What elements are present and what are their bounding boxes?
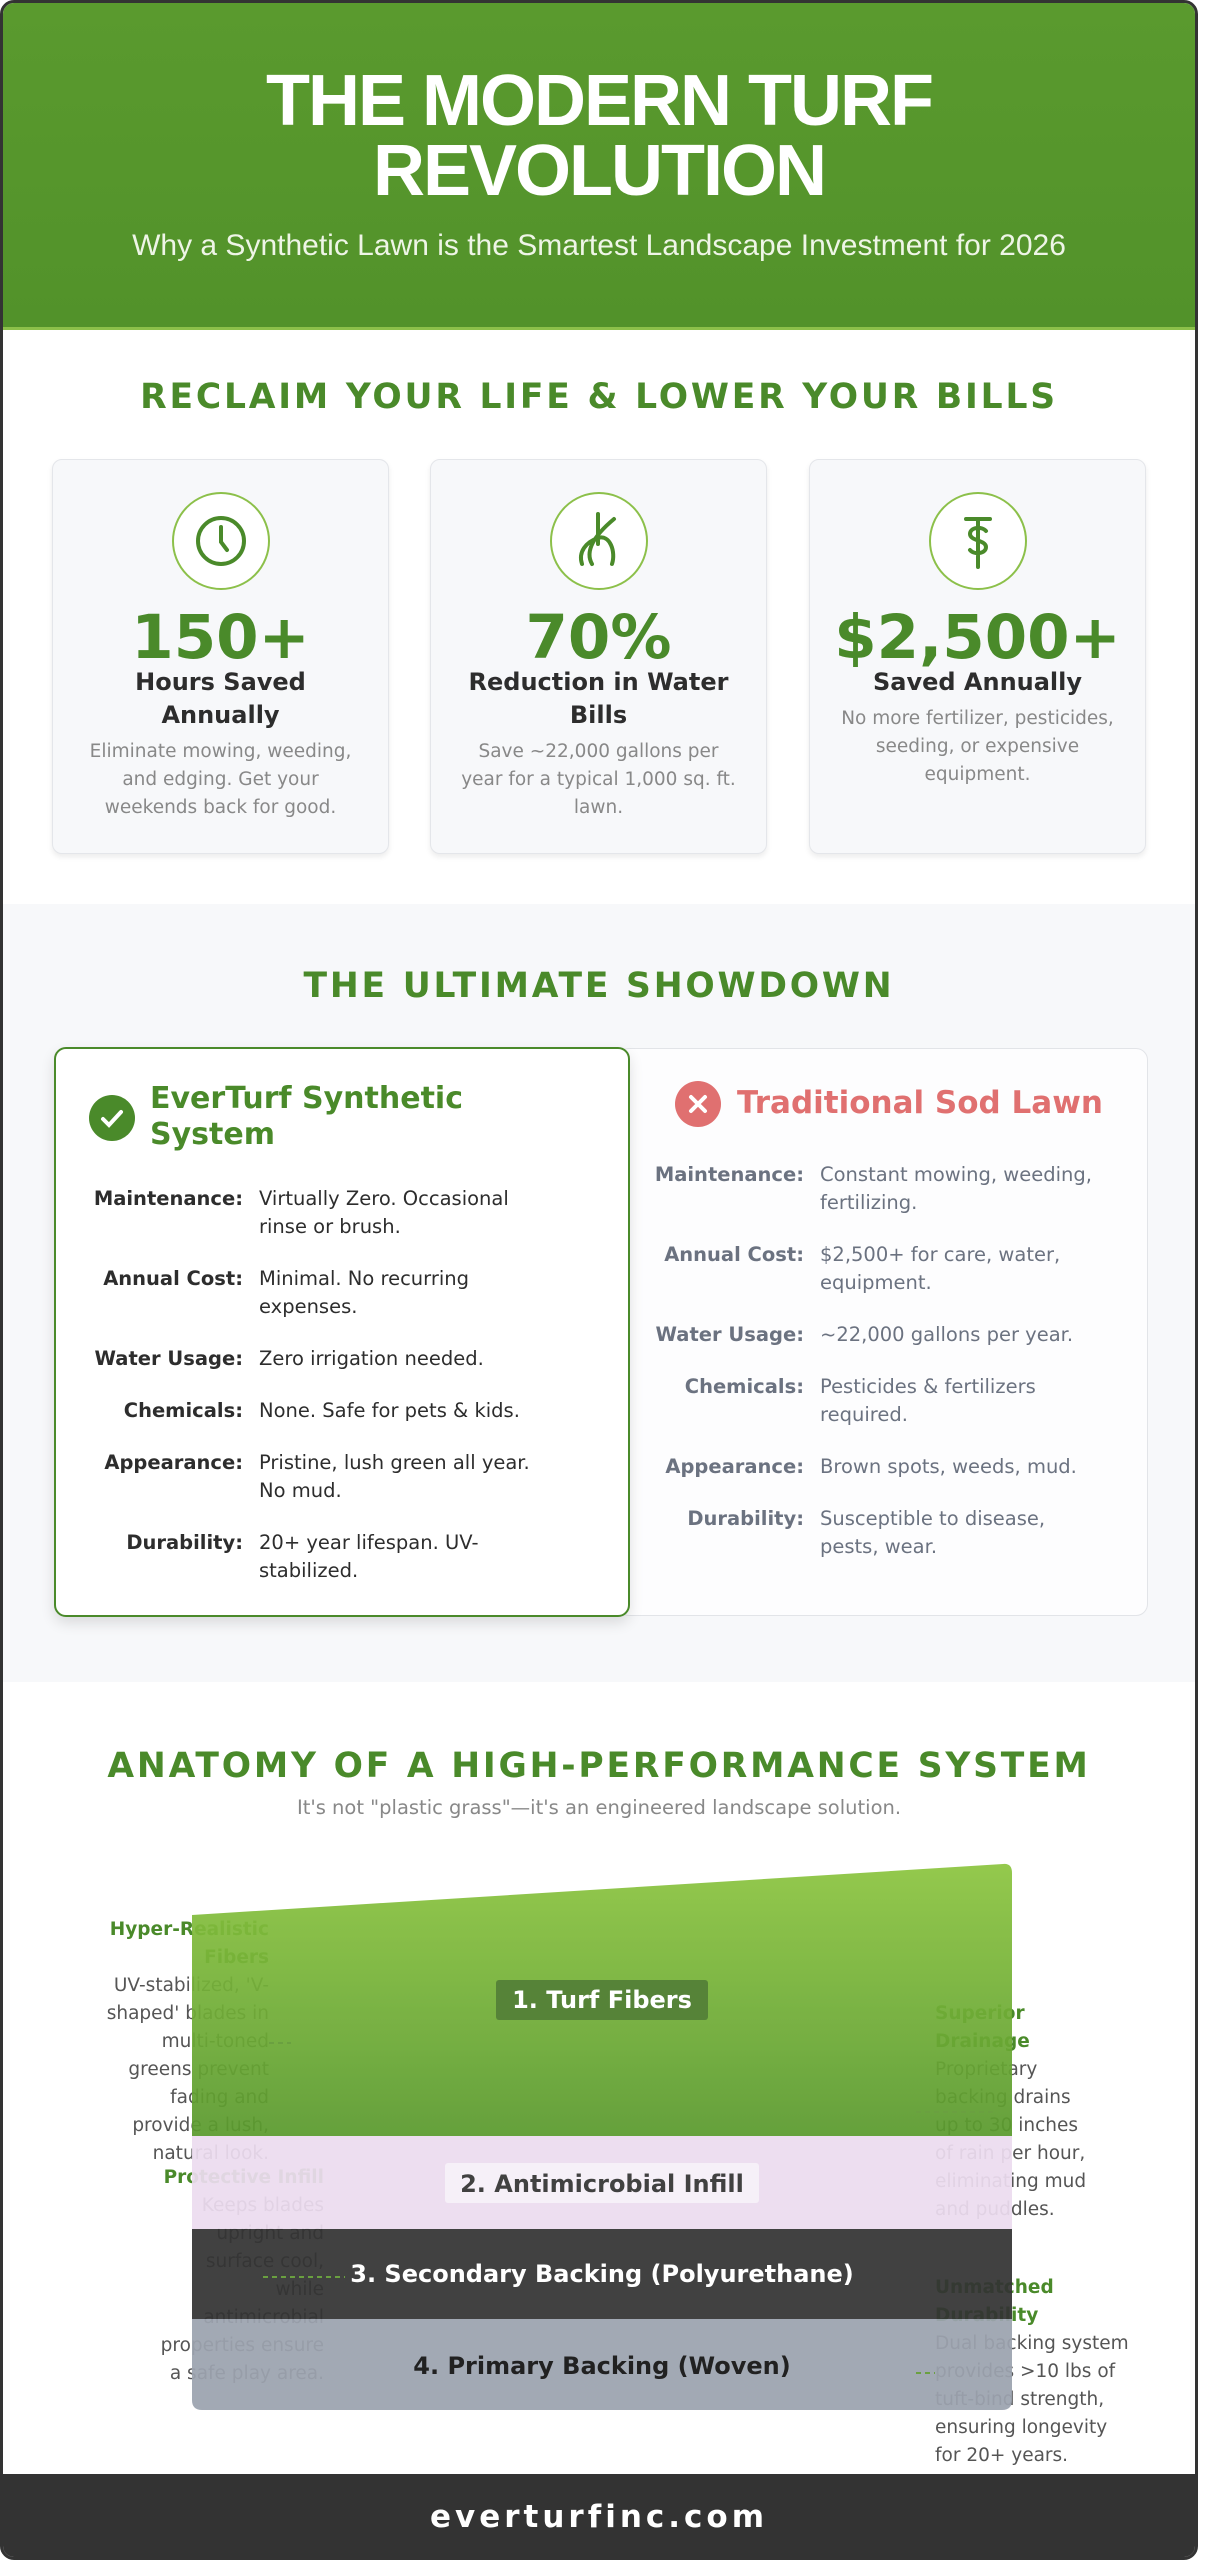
stat label: Reduction in Water [469,668,728,696]
card: money [809,459,1146,854]
footer [3,2474,1195,2560]
comparison rows: None. Safe for pets & kids. [259,1399,520,1422]
description: No more fertilizer, pesticides, seeding, or expensive equipment. [841,708,1114,785]
icon: water [550,492,648,590]
comparison rows: Appearance: [104,1451,243,1474]
icon: x [675,1081,721,1127]
comparison rows: Durability: [126,1531,243,1554]
icon: clock [172,492,270,590]
icon: check [89,1095,135,1141]
comparison rows: 20+ year lifespan. UV-stabilized. [259,1531,478,1582]
subtitle: anatomy: It's not "plastic grass"—it's an engineered landscape solution. [297,1796,901,1819]
panel title: Traditional Sod Lawn [737,1085,1103,1121]
comparison rows: Appearance: [665,1455,804,1478]
annotation: drainage: Superior Drainage [935,2003,1030,2052]
comparison rows: Annual Cost: [664,1243,804,1266]
comparison rows: Pesticides & fertilizers required. [820,1375,1036,1426]
layer 3: secondary backing: 3. Secondary Backing (Polyurethane) [350,2260,854,2288]
section: showdown background [3,904,1195,1682]
panel title [150,1081,463,1152]
stat label: Saved Annually [873,668,1082,696]
comparison rows [94,1187,530,1582]
title [266,61,932,211]
comparison rows: Virtually Zero. Occasional rinse or brush. [259,1187,509,1238]
annotation: fibers: Hyper-Realistic Fibers [110,1919,269,1968]
stat label [469,668,728,729]
stat label: Bills [570,701,627,729]
layer 1: turf fibers [192,1864,1012,2136]
annotation: infill: Protective Infill [164,2167,324,2188]
comparison rows: Pristine, lush green all year. No mud. [259,1451,530,1502]
comparison rows: Brown spots, weeds, mud. [820,1455,1077,1478]
comparison rows: Maintenance: [94,1187,243,1210]
panel title: System [150,1117,275,1152]
layer 4: primary backing [192,2319,1012,2410]
comparison rows: Maintenance: [655,1163,804,1186]
layer 2: infill: 2. Antimicrobial Infill [460,2170,744,2198]
card: hours [52,459,389,854]
description: Save ~22,000 gallons per year for a typical 1,000 sq. ft. lawn. [461,741,736,818]
stat number: 150+ [131,602,310,673]
layer 3: secondary backing [192,2229,1012,2319]
annotation: drainage: Proprietary backing drains up to 30 inches of rain per hour, eliminating mud and puddles. [935,2059,1086,2220]
stat label [135,668,306,729]
diagram: turf layers [192,1864,1012,2410]
layer 2: infill [192,2136,1012,2229]
header [3,3,1195,330]
comparison rows: Water Usage: [655,1323,804,1346]
comparison rows: Durability: [687,1507,804,1530]
stat label: Annually [161,701,280,729]
heading: anatomy: ANATOMY OF A HIGH-PERFORMANCE SYSTEM [107,1746,1091,1786]
heading: reclaim: RECLAIM YOUR LIFE & LOWER YOUR BILLS [140,377,1058,417]
comparison rows: Chemicals: [685,1375,804,1398]
comparison rows: Susceptible to disease, pests, wear. [820,1507,1045,1558]
footer: everturfinc.com [430,2499,768,2535]
stat number: 70% [525,602,672,673]
comparison rows: Minimal. No recurring expenses. [259,1267,469,1318]
card: water [430,459,767,854]
annotation: durability: Dual backing system provides >10 lbs of tuft-bind strength, ensuring longevity for 20+ years. [935,2333,1129,2466]
comparison rows: Water Usage: [94,1347,243,1370]
comparison rows: ~22,000 gallons per year. [820,1323,1073,1346]
layer 1: turf fibers: 1. Turf Fibers [512,1986,692,2014]
icon: dollar [929,492,1027,590]
annotation: durability: Unmatched Durability [935,2277,1054,2326]
annotation: infill: Keeps blades upright and surface cool, while antimicrobial properties ensure a safe play area. [161,2195,324,2384]
panel: traditional sod [617,1048,1148,1616]
heading: showdown: THE ULTIMATE SHOWDOWN [304,966,894,1006]
comparison rows: Chemicals: [124,1399,243,1422]
comparison rows: $2,500+ for care, water, equipment. [820,1243,1060,1294]
stat label: Hours Saved [135,668,306,696]
panel: everturf [54,1047,630,1617]
stat number: $2,500+ [834,602,1121,673]
description: Eliminate mowing, weeding, and edging. Get your weekends back for good. [90,741,351,818]
title: REVOLUTION [373,131,825,211]
panel title: EverTurf Synthetic [150,1081,463,1116]
comparison rows: Constant mowing, weeding, fertilizing. [820,1163,1092,1214]
comparison rows: Annual Cost: [103,1267,243,1290]
layer 4: primary backing: 4. Primary Backing (Woven) [413,2352,791,2380]
comparison rows: Zero irrigation needed. [259,1347,484,1370]
annotation: fibers: UV-stabilized, 'V-shaped' blades in multi-toned greens prevent fading and provide a lush, natural look. [107,1975,269,2164]
comparison rows [655,1163,1092,1558]
title: THE MODERN TURF [266,61,932,141]
subtitle: Why a Synthetic Lawn is the Smartest Landscape Investment for 2026 [132,229,1066,262]
